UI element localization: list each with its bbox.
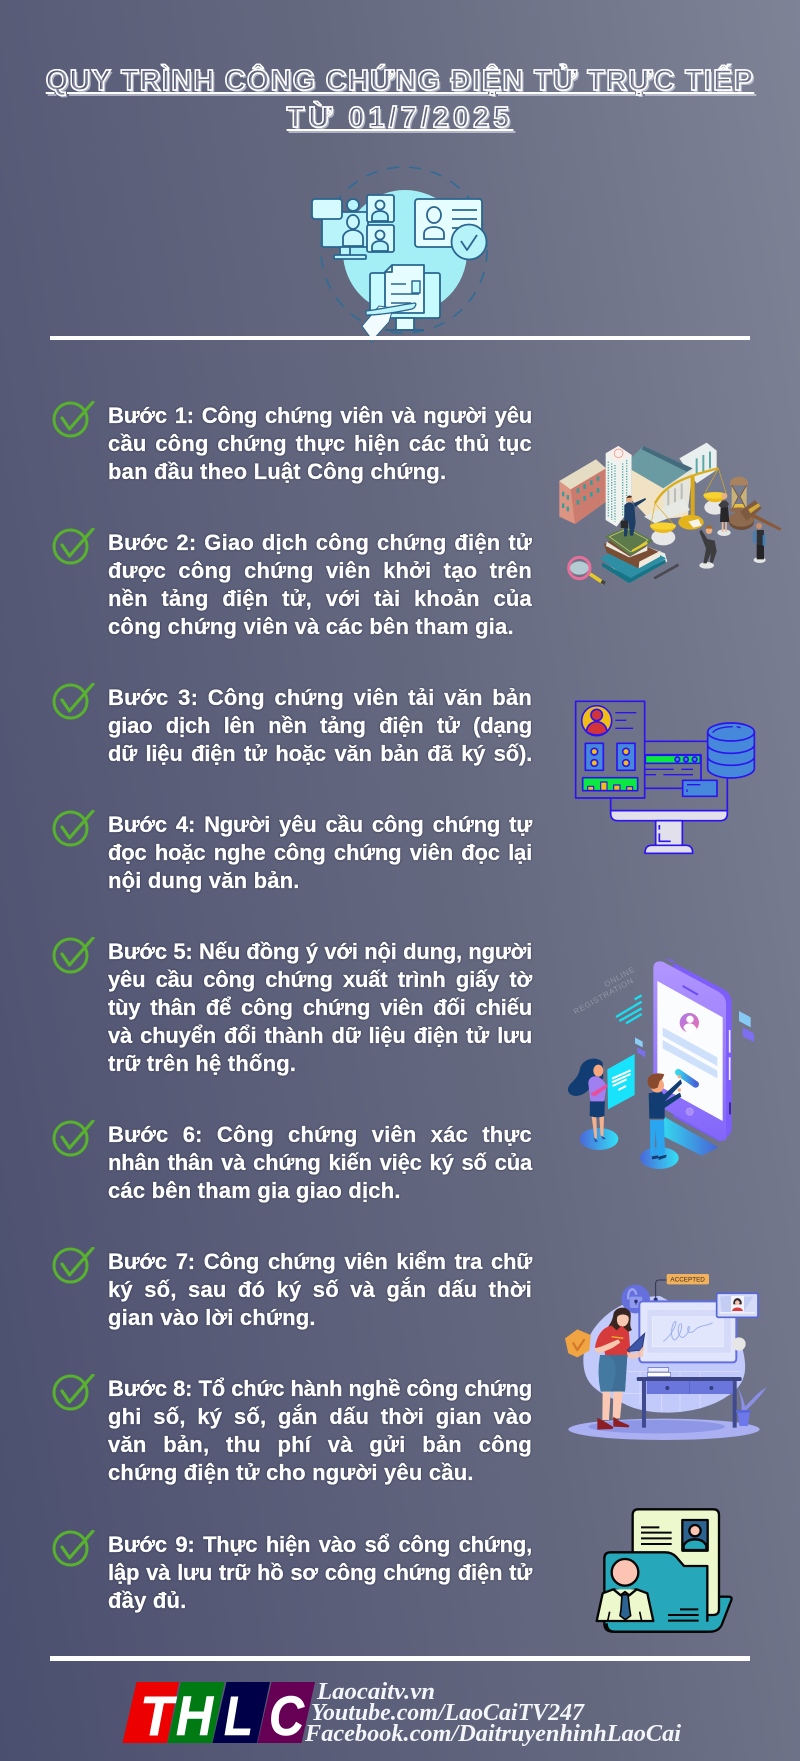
text: step 4: Bước 4: Người yêu cầu công chứng tự — [108, 812, 532, 837]
step 1 — [52, 401, 532, 485]
text: step 5: trữ trên hệ thống. — [108, 1051, 296, 1076]
text: step 1: ban đầu theo Luật Công chứng. — [108, 459, 446, 484]
footer logo: THLC — [122, 1682, 315, 1746]
text: step 6: nhân thân và chứng kiến việc ký số của — [108, 1150, 532, 1175]
title: QUY TRÌNH CÔNG CHỨNG ĐIỆN TỬ TRỰC TIẾP — [46, 65, 754, 97]
footer links — [304, 1680, 681, 1747]
text: step 2: nền tảng điện tử, với tài khoản của — [108, 586, 532, 611]
footer logo: THLC: L — [224, 1684, 253, 1746]
text: step 4 — [108, 812, 534, 894]
divider: top — [50, 336, 750, 340]
text: step 8: ghi số, ký số, gắn dấu thời gian vào — [108, 1404, 532, 1429]
text: step 5: Bước 5: Nếu đồng ý với nội dung, người — [108, 939, 532, 964]
icon: check — [52, 1530, 95, 1566]
text: step 3 — [108, 685, 532, 766]
text: step 5 — [107, 939, 534, 1076]
text: step 5: yêu cầu công chứng xuất trình giấy tờ — [108, 967, 532, 992]
text: step 8: văn bản, thu phí và gửi bản công — [108, 1432, 532, 1457]
text: step 3: giao dịch lên nền tảng điện tử (dạng — [108, 713, 532, 738]
footer links: Youtube.com/LaoCaiTV247 — [311, 1700, 585, 1726]
step 4 — [52, 810, 534, 894]
text: step 7: gian vào lời chứng. — [108, 1305, 316, 1330]
text: step 4: đọc hoặc nghe công chứng viên đọc lại — [108, 840, 532, 865]
footer logo: THLC: T — [140, 1684, 178, 1746]
text: step 1: cầu công chứng thực hiện các thủ tục — [108, 431, 532, 456]
icon: check — [52, 1120, 95, 1156]
icon: check — [52, 683, 95, 720]
step 6 — [52, 1120, 534, 1204]
icon: check — [52, 1247, 95, 1284]
step 3 — [52, 683, 532, 766]
text: step 7 — [108, 1249, 534, 1330]
text: step 3: dữ liệu điện tử hoặc văn bản đã ký số). — [108, 741, 532, 766]
divider: bottom — [50, 1656, 750, 1661]
icon: check — [52, 1374, 95, 1410]
icon: online notarization hero — [311, 166, 488, 343]
illustration: woman signing digitally: ACCEPTED — [670, 1276, 705, 1283]
footer logo: THLC: H — [176, 1684, 214, 1746]
title: TỪ 01/7/2025 — [287, 102, 513, 134]
footer links: Facebook.com/DaitruyenhinhLaoCai — [304, 1721, 681, 1747]
text: step 2 — [108, 530, 533, 640]
illustration: online registration on phone — [568, 958, 754, 1169]
text: step 5: tùy thân để công chứng viên đối chiếu — [108, 995, 532, 1020]
text: step 6 — [108, 1122, 534, 1204]
title — [46, 63, 756, 134]
text: step 1: Bước 1: Công chứng viên và người yêu — [108, 403, 532, 428]
text: step 2: Bước 2: Giao dịch công chứng điện tử — [108, 530, 532, 555]
illustration: online registration on phone: ONLINE — [603, 965, 637, 989]
text: step 3: Bước 3: Công chứng viên tải văn bản — [108, 685, 532, 710]
illustration: data on a computer — [574, 700, 756, 854]
illustration: online registration on phone: REGISTRATION — [572, 976, 635, 1016]
icon: check — [52, 937, 95, 974]
text: step 2: công chứng viên và các bên tham gia. — [108, 614, 514, 639]
illustration: folder with profile — [596, 1508, 733, 1633]
text: step 9 — [108, 1532, 534, 1614]
step 7 — [52, 1247, 534, 1330]
text: step 7: Bước 7: Công chứng viên kiểm tra chữ — [108, 1249, 532, 1274]
illustration: law and buildings — [559, 442, 782, 585]
text: step 5: và chuyển đổi thành dữ liệu điện tử lưu — [108, 1023, 532, 1048]
text: step 2: được công chứng viên khởi tạo trên — [108, 558, 532, 583]
step 2 — [52, 528, 533, 640]
icon: check — [52, 401, 95, 438]
text: step 4: nội dung văn bản. — [108, 868, 300, 893]
footer logo: THLC: C — [269, 1684, 305, 1746]
text: step 9: đầy đủ. — [108, 1588, 186, 1613]
illustration: woman signing digitally — [565, 1274, 766, 1440]
step 5 — [52, 937, 534, 1076]
text: step 8: Bước 8: Tổ chức hành nghề công chứng — [108, 1376, 532, 1401]
text: step 1 — [108, 403, 532, 485]
text: step 8 — [108, 1376, 532, 1486]
text: step 6: các bên tham gia giao dịch. — [108, 1178, 401, 1203]
icon: check — [52, 528, 95, 564]
step 9 — [52, 1530, 534, 1614]
text: step 9: Bước 9: Thực hiện vào sổ công chứng, — [108, 1532, 532, 1557]
step 8 — [52, 1374, 532, 1486]
text: step 6: Bước 6: Công chứng viên xác thực — [108, 1122, 532, 1147]
text: step 7: ký số, sau đó ký số và gắn dấu thời — [108, 1277, 532, 1302]
icon: check — [52, 810, 95, 846]
text: step 9: lập và lưu trữ hồ sơ công chứng điện tử — [108, 1560, 532, 1585]
text: step 8: chứng điện tử cho người yêu cầu. — [108, 1460, 474, 1485]
